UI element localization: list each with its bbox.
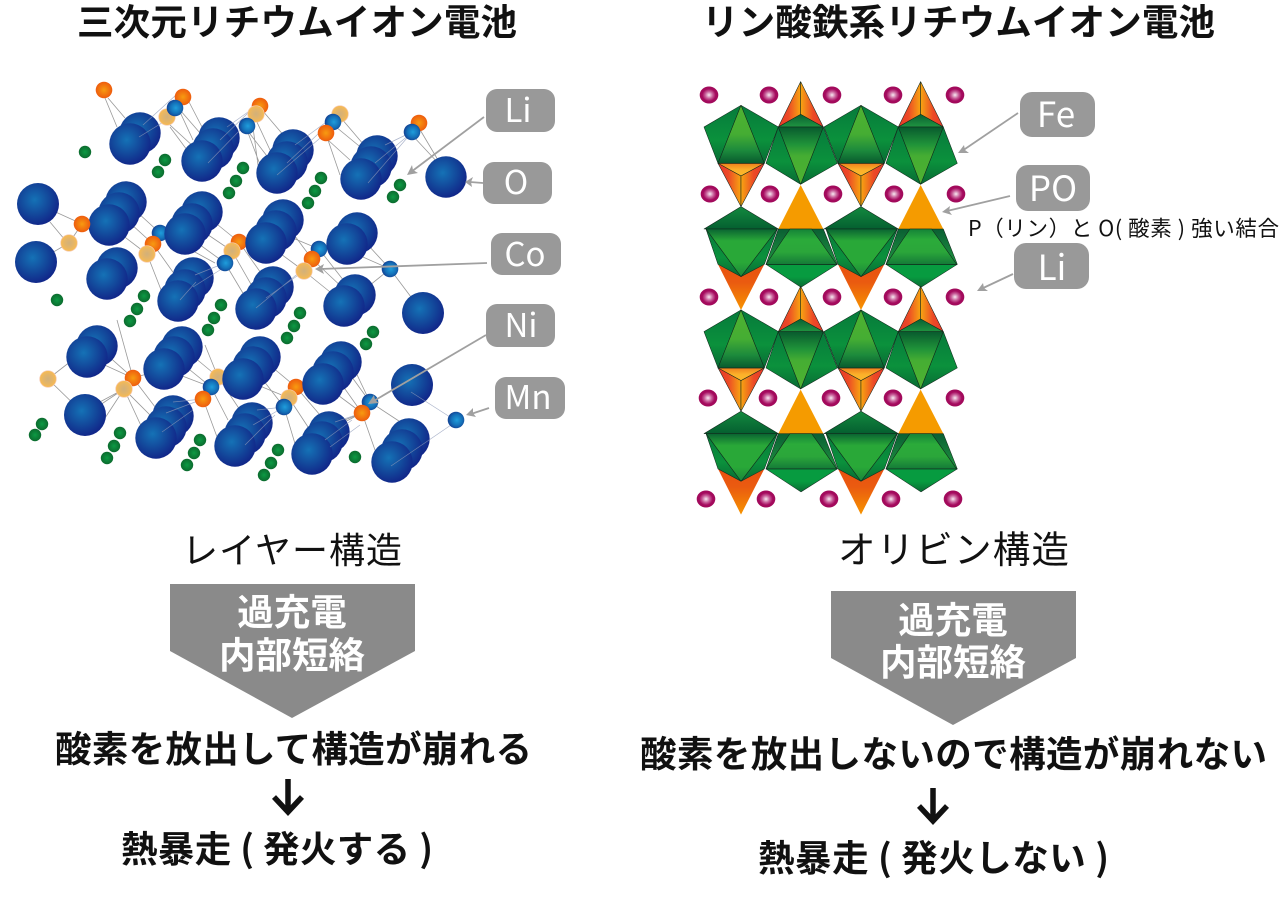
arrow: Co <box>315 263 487 274</box>
label: Li (left): Li <box>504 84 532 132</box>
structure name: left: レイヤー構造 <box>182 522 402 574</box>
label: Co: Co <box>504 228 546 276</box>
label: PO: PO <box>1029 161 1077 212</box>
label: Ni: Ni <box>505 299 537 347</box>
polyhedra upper block <box>704 82 957 310</box>
label: Mn: Mn <box>505 371 551 419</box>
polyhedra lower block <box>704 286 957 515</box>
lithium ions <box>697 86 965 508</box>
down block arrow: right: 過充電 <box>898 591 1008 644</box>
arrow: O <box>465 177 483 187</box>
cobalt atoms <box>40 106 348 406</box>
conclusion: right: 熱暴走 ( 発火しない ) <box>758 829 1109 882</box>
label: Fe: Fe <box>1037 87 1075 138</box>
manganese atoms <box>74 82 427 386</box>
bonds drawn over spheres <box>139 95 451 466</box>
bonds behind atoms <box>36 98 440 450</box>
arrow icon: left <box>274 779 302 812</box>
arrow: PO <box>942 196 1010 215</box>
front manganese atoms <box>195 125 370 421</box>
label: O <box>483 156 552 204</box>
structure name: right: オリビン構造 <box>838 519 1069 574</box>
label: Co <box>491 228 561 276</box>
label: Fe <box>1020 87 1095 138</box>
oxygen and metal atoms partly hidden behind spheres <box>152 225 327 395</box>
oxygen spheres <box>15 112 467 483</box>
olivine crystal structure diagram <box>697 82 965 515</box>
down block arrow: right <box>831 591 1076 725</box>
lithium atoms <box>29 146 406 481</box>
down block arrow: left <box>170 583 415 718</box>
nickel atoms <box>167 100 464 428</box>
label: PO <box>1016 161 1090 212</box>
result: left: 酸素を放出して構造が崩れる <box>55 720 532 773</box>
arrow: Li <box>407 117 484 175</box>
result: right: 酸素を放出しないので構造が崩れない <box>640 725 1267 778</box>
down block arrow: left: 内部短絡 <box>219 626 365 679</box>
label: Mn <box>495 371 565 419</box>
label: Li (left) <box>486 84 555 132</box>
arrow: Mn <box>466 408 489 417</box>
label: O: O <box>504 156 528 204</box>
label: Ni <box>486 299 555 347</box>
arrow: Fe <box>958 113 1018 153</box>
arrow icon: right <box>919 788 947 821</box>
down block arrow: right: 内部短絡 <box>880 633 1026 686</box>
arrow: Li right <box>977 274 1013 291</box>
label: Li (right): Li <box>1038 240 1066 291</box>
layered crystal structure diagram <box>15 82 467 483</box>
label: Li (right) <box>1014 240 1089 291</box>
conclusion: left: 熱暴走 ( 発火する ) <box>121 820 433 873</box>
arrow: Ni <box>368 335 486 404</box>
annotation: PO bond: P（リン）と O( 酸素 ) 強い結合 <box>968 212 1279 243</box>
down block arrow: left: 過充電 <box>237 583 347 636</box>
